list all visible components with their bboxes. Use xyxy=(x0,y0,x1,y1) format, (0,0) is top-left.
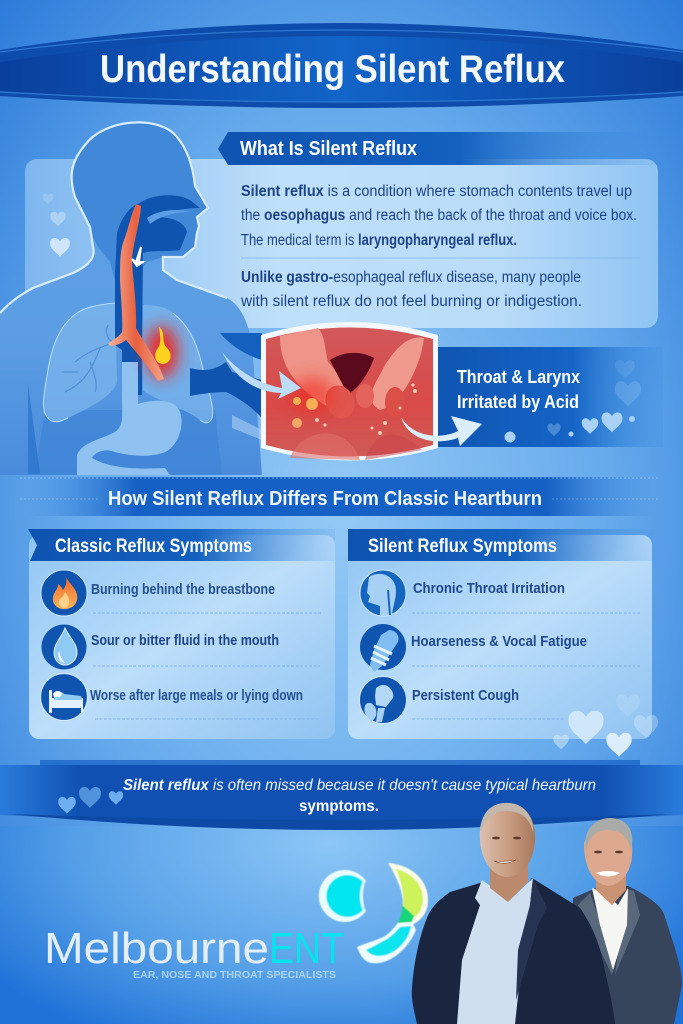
section heading: How Silent Reflux Differs From Classic Heartburn xyxy=(108,487,542,510)
throat image xyxy=(261,322,438,460)
airway xyxy=(115,195,200,395)
row: hoarseness xyxy=(360,624,640,672)
title: Understanding Silent Reflux xyxy=(100,48,565,91)
esophagus xyxy=(108,204,164,381)
text block: definition: the oesophagus and reach the back of the throat and voice box. xyxy=(241,207,637,224)
panel: what is silent reflux xyxy=(25,159,658,328)
torso xyxy=(0,122,262,475)
wordmark: Melbourne xyxy=(44,924,269,973)
footer background xyxy=(0,826,683,1024)
row: throat irritation xyxy=(360,570,640,616)
row: cough: Persistent Cough xyxy=(412,688,519,704)
down arrow xyxy=(132,247,143,266)
row: burning xyxy=(41,570,322,616)
arrow out of throat xyxy=(401,416,482,446)
flame xyxy=(155,327,171,364)
head outline xyxy=(0,122,227,313)
logo: Melbourne ENT: ENT xyxy=(269,924,344,973)
photo: second doctor xyxy=(570,818,682,1024)
row: worse after meals: Worse after large meals or lying down xyxy=(90,688,303,704)
neck xyxy=(596,870,626,905)
hearts xyxy=(504,360,641,442)
hearts xyxy=(42,194,70,257)
head shading xyxy=(72,122,208,300)
panel: silent reflux symptoms: Silent Reflux Symptoms xyxy=(368,536,557,557)
row: hoarseness: Hoarseness & Vocal Fatigue xyxy=(411,634,587,650)
tagline: EAR, NOSE AND THROAT SPECIALISTS xyxy=(133,969,336,981)
face xyxy=(584,829,632,886)
shirt xyxy=(457,878,533,1024)
logo: Melbourne ENT xyxy=(44,863,428,981)
hearts xyxy=(58,787,123,814)
neck xyxy=(490,855,528,902)
heading: what is silent reflux: What Is Silent Reflux xyxy=(240,138,417,160)
shirt xyxy=(592,888,628,970)
title banner xyxy=(0,23,683,108)
jacket xyxy=(570,886,682,1024)
text block: definition: The medical term is laryngopharyngeal reflux. xyxy=(241,232,517,249)
eyes and smile xyxy=(596,871,620,876)
panel: silent reflux symptoms xyxy=(348,529,658,757)
header xyxy=(348,529,655,561)
row: sour fluid: Sour or bitter fluid in the mouth xyxy=(91,633,279,649)
lapel xyxy=(516,878,547,1000)
lower torso shade xyxy=(35,410,222,475)
callout text: Silent reflux is often missed because it doesn't cause typical heartburn xyxy=(123,777,596,794)
eyes and smile xyxy=(492,837,521,839)
hair xyxy=(585,818,632,850)
connecting swoosh arrow xyxy=(190,362,262,418)
row: throat irritation: Chronic Throat Irritation xyxy=(413,581,565,597)
logo mark xyxy=(319,863,428,963)
band: throat caption: Irritated by Acid xyxy=(457,392,579,412)
body illustration xyxy=(0,122,262,475)
row: sour fluid xyxy=(42,624,320,670)
stomach xyxy=(77,362,182,475)
bronchi left xyxy=(62,325,113,392)
hearts xyxy=(553,694,658,757)
header xyxy=(28,529,335,561)
heading: what is silent reflux xyxy=(218,132,655,165)
inflammation glow xyxy=(146,326,178,378)
lungs xyxy=(43,303,117,422)
text block: definition: Silent reflux is a condition where stomach contents travel up xyxy=(241,183,632,200)
jacket xyxy=(412,878,615,1024)
section heading band xyxy=(0,477,683,516)
band: throat caption xyxy=(438,347,663,447)
light stripes under arrow xyxy=(232,415,262,440)
band behind throat image xyxy=(220,333,262,360)
caption: Throat & Larynx xyxy=(457,367,580,387)
throat tissue xyxy=(280,328,344,406)
face xyxy=(480,803,535,877)
callout band: symptoms. xyxy=(299,798,379,815)
text block: definition: with silent reflux do not feel burning or indigestion. xyxy=(240,293,582,310)
arrow into throat xyxy=(222,352,301,399)
left arm streak xyxy=(28,383,40,474)
hair xyxy=(481,803,533,832)
row: cough xyxy=(360,676,565,724)
row: burning: Burning behind the breastbone xyxy=(91,582,275,598)
text block: definition xyxy=(240,183,640,310)
row: worse after meals xyxy=(40,674,320,720)
panel: classic reflux symptoms xyxy=(28,529,335,739)
photo: first doctor xyxy=(412,803,615,1024)
panel: classic reflux symptoms: Classic Reflux Symptoms xyxy=(55,536,252,557)
text block: definition: Unlike gastro-esophageal reflux disease, many people xyxy=(241,269,581,286)
lapels xyxy=(578,893,615,975)
callout band xyxy=(0,760,683,830)
